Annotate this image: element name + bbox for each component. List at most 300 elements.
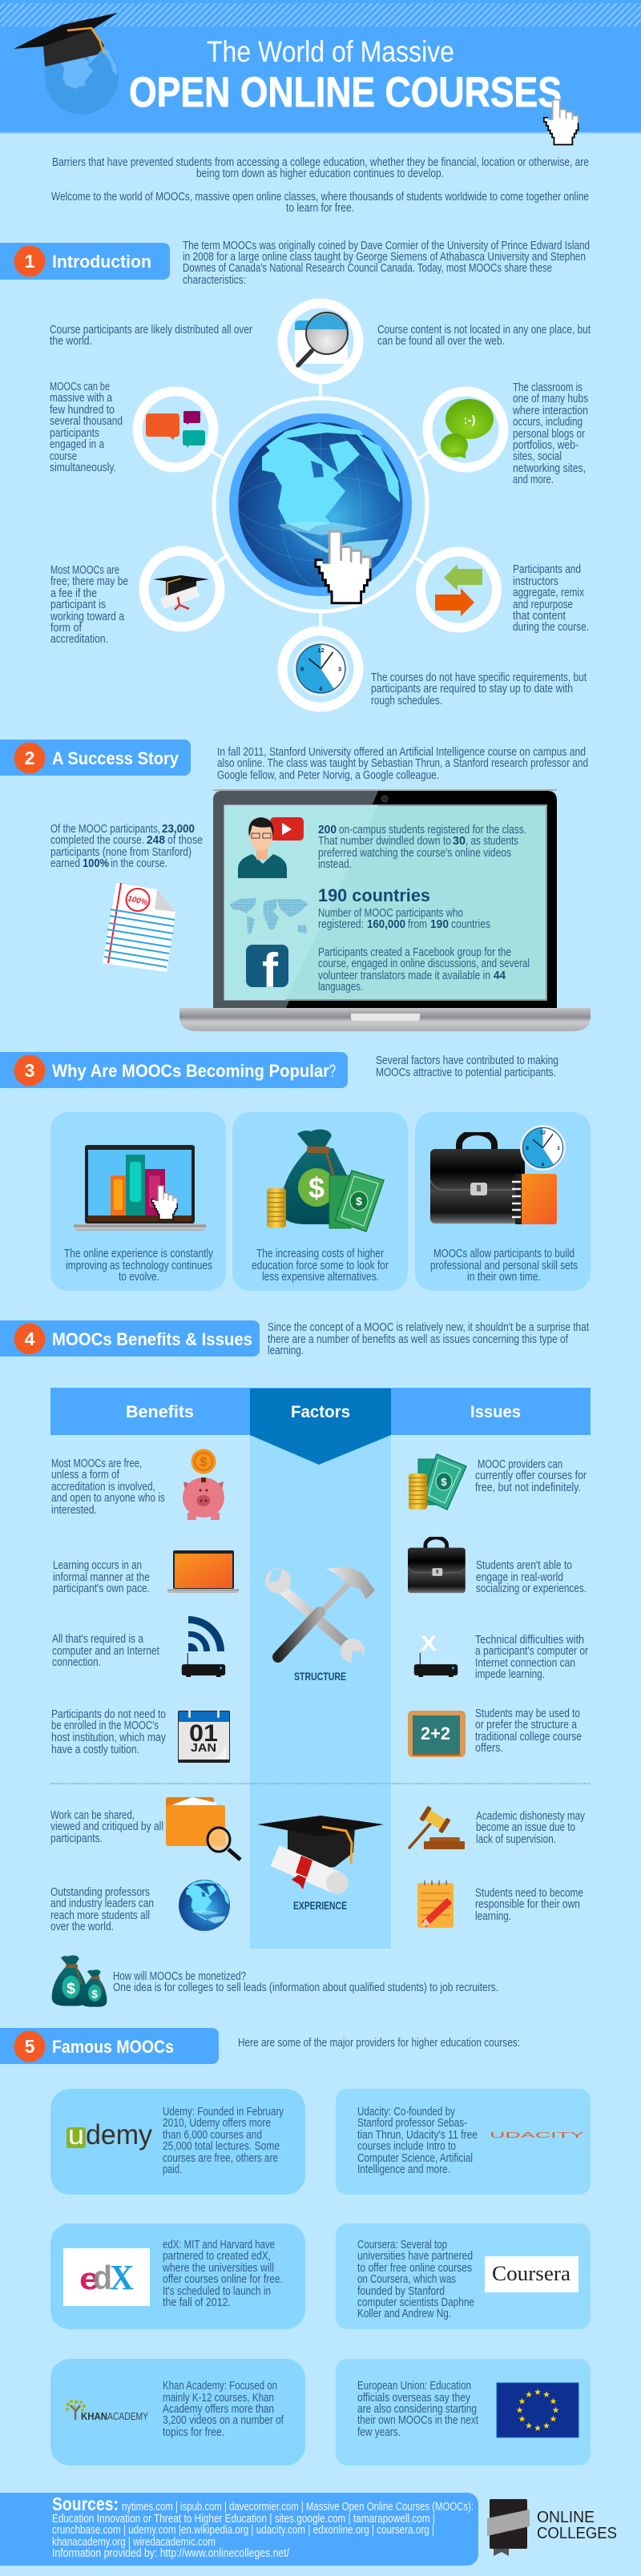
benefit: sharing work: Work can be shared, [50, 1809, 135, 1822]
issue: socializing [476, 1559, 587, 1595]
description: founded by Stanford [357, 2285, 445, 2298]
issue: traditional structure [475, 1707, 582, 1755]
benefit: no enrollment: have a costly tuition. [51, 1744, 139, 1756]
factor icon: wrench and hammer [265, 1566, 375, 1664]
issue: socializing: engage in real-world [476, 1571, 563, 1584]
logo: udemy: demy [86, 2119, 152, 2151]
Online Colleges logo [487, 2499, 617, 2556]
logo: udemy: u [68, 2120, 84, 2151]
intro text: being torn down as higher education continues to develop. [196, 167, 444, 180]
characteristic: free: a fee if the [50, 587, 97, 600]
characteristic: massive: participants [50, 427, 99, 440]
caption: The increasing costs of higher [256, 1248, 384, 1260]
benefit: no enrollment: host institution, which may [51, 1731, 167, 1744]
characteristic: free [50, 564, 128, 646]
icon: piggy bank with coin [183, 1449, 224, 1520]
screen text: facebook group: Participants created a Facebook group for the [318, 946, 511, 959]
description: courses are free, others are [163, 2152, 278, 2165]
description [162, 2239, 283, 2309]
completion statistics text: Of the MOOC participants, [50, 823, 160, 836]
characteristic: hubs [512, 381, 588, 486]
node: cap and diploma [144, 551, 220, 627]
screen text: facebook group: course, engaged in online discussions, and several [318, 957, 530, 970]
characteristic: free: working toward a [50, 611, 125, 623]
title: OPEN ONLINE COURSES [129, 69, 562, 116]
caption: The online experience is constantly [64, 1248, 214, 1260]
screen text: 190 countries: registered: [318, 918, 364, 931]
screen text: on-campus students [318, 824, 526, 871]
screen text: 190 countries: Number of MOOC participants who [318, 907, 463, 920]
section 5 intro text: Here are some of the major providers for higher education courses: [238, 2037, 520, 2050]
column heading: issues: Issues [470, 1403, 521, 1421]
icon: calendar: 01 [189, 1720, 218, 1747]
completion statistics text: 23,000 [162, 823, 195, 836]
issue: socializing: Students aren't able to [476, 1559, 572, 1572]
description [357, 2239, 474, 2320]
characteristic: aggregate and remix: that content [513, 610, 566, 623]
section 3 heading: ? [329, 1061, 336, 1081]
laptop [179, 789, 591, 1031]
icon: broken connection router [414, 1631, 458, 1677]
section 4 heading: MOOCs Benefits & Issues [52, 1329, 252, 1349]
issue: technical difficulties [475, 1634, 588, 1681]
description: than 6,000 courses and [163, 2129, 262, 2142]
screen text: 190 countries: 190 countries [318, 885, 430, 905]
logo: Khan Academy: KHAN [81, 2410, 107, 2422]
issue: traditional structure: or prefer the structure a [475, 1719, 578, 1731]
description: 2010, Udemy offers more [163, 2117, 271, 2130]
logo: udacity: UDACITY [490, 2131, 584, 2140]
benefit: reach: reach more students all [50, 1909, 150, 1922]
section 1 intro text: characteristics: [183, 274, 246, 287]
benefit: free: accreditation is involved, [51, 1481, 155, 1494]
section 5 heading: 5 [25, 2036, 35, 2057]
completion statistics text [50, 823, 203, 870]
issue: academic dishonesty: Academic dishonesty may [476, 1810, 586, 1823]
section 2 intro text: Google fellow, and Peter Norvig, a Google colleague. [217, 769, 439, 782]
characteristic: massive: course [50, 450, 77, 463]
icon: money bags [52, 1955, 107, 2007]
icon: gavel [409, 1806, 465, 1849]
intro text: to learn for free. [286, 202, 354, 215]
icon: chalkboard [408, 1711, 466, 1757]
issue: technical difficulties: a participant's computer or [475, 1645, 588, 1658]
logo: Khan Academy [66, 2400, 148, 2422]
characteristic: distributed participants [50, 324, 252, 348]
benefit: sharing work: viewed and critiqued by all [50, 1820, 163, 1833]
characteristic: no specific requirements: The courses do not have specific requirements, but [371, 671, 587, 684]
description [357, 2106, 478, 2176]
characteristic: no specific requirements: rough schedules. [371, 695, 442, 707]
laptop base [179, 1008, 591, 1031]
issue: self-responsibility: Students need to become [475, 1887, 583, 1900]
characteristic: hubs: one of many hubs [513, 393, 588, 405]
description: partnered to created edX, [163, 2250, 271, 2263]
sources text: crunchbase.com | udemy.com |en.wikipedia.org | udacity.com | edxonline.org | coursera.org | [52, 2524, 434, 2537]
characteristic: hubs: networking sites, [513, 462, 586, 475]
description: It's scheduled to launch in [163, 2285, 271, 2298]
description [357, 2380, 478, 2439]
description: on Coursera, which was [357, 2273, 456, 2286]
characteristic: no specific requirements [371, 671, 587, 707]
issue: not indefinitely free: MOOC providers can [478, 1458, 562, 1471]
section 4 intro text: there are a number of benefits as well as issues concerning this type of [268, 1333, 569, 1346]
completion statistics text: 248 [147, 834, 165, 847]
icon: teal bills and coins [409, 1454, 466, 1510]
description: 3,200 videos on a number of [163, 2414, 284, 2427]
monetization note [52, 1955, 498, 2007]
section 4 heading [0, 1320, 260, 1357]
panel: Khan Academy [50, 2359, 305, 2465]
screen text: 190 countries: from [408, 918, 427, 931]
issue: self-responsibility [475, 1887, 583, 1923]
characteristic: hubs: occurs, including [513, 416, 583, 429]
issue: socializing: socializing or experiences. [476, 1582, 587, 1595]
benefit: informal learning: Learning occurs in an [53, 1559, 142, 1572]
caption: less expensive alternatives. [262, 1271, 379, 1284]
icon: facebook [246, 944, 288, 998]
Online Colleges logo: COLLEGES [537, 2525, 617, 2542]
panel: Udacity [336, 2089, 591, 2195]
sources footer [0, 2493, 478, 2566]
icon: briefcase, clock and notebook [430, 1125, 566, 1224]
description: offer courses online for free. [163, 2273, 283, 2286]
caption [430, 1248, 578, 1284]
section 4 intro text [268, 1321, 589, 1357]
screen text: on-campus students: preferred watching the course's online videos [318, 847, 511, 860]
icon: notepad and pencil [417, 1881, 454, 1928]
central globe [229, 413, 412, 596]
characteristic: massive: massive with a [50, 392, 113, 405]
screen text: on-campus students: 200 [318, 824, 337, 836]
factor label: structure: STRUCTURE [294, 1670, 346, 1683]
characteristic: aggregate and remix: and repurpose [513, 599, 573, 611]
description: are also considering starting [357, 2403, 477, 2416]
benefit: no enrollment: be enrolled in the MOOC's [51, 1719, 159, 1732]
completion statistics text: earned [50, 857, 80, 870]
characteristic: hubs: and more. [513, 474, 554, 486]
issue: technical difficulties: Internet connection can [475, 1657, 575, 1670]
description: paid. [163, 2163, 182, 2176]
node: magnifier on web page [282, 303, 359, 380]
benefit: sharing work: participants. [50, 1832, 103, 1845]
characteristic: massive: few hundred to [50, 404, 115, 417]
completion statistics text: 100% [83, 857, 109, 870]
description: where the universities will [162, 2262, 274, 2275]
node: clock [282, 631, 359, 707]
panel: European Union [336, 2359, 591, 2465]
issue: self-responsibility: responsible for their own [475, 1898, 580, 1911]
panel: edX [50, 2223, 305, 2329]
icon: facebook: f [262, 944, 279, 998]
logo: Coursera: Coursera [492, 2262, 570, 2285]
section 1 intro text: Downes of Canada's National Research Council Canada. Today, most MOOCs share these [183, 262, 552, 275]
characteristic: massive: MOOCs can be [50, 381, 110, 393]
icon: wifi router [182, 1616, 225, 1677]
icon: piggy bank with coin: $ [200, 1456, 208, 1469]
monetization text: One idea is for colleges to sell leads (information about qualified students) to job recruiters. [113, 1981, 498, 1994]
characteristic: hubs: personal blogs or [513, 428, 585, 441]
sources text: khanacademy.org | wiredacademic.com [52, 2536, 216, 2549]
characteristic: hubs: sites, social [513, 450, 562, 463]
characteristic: aggregate and remix: aggregate, remix [513, 587, 585, 599]
benefit: only a computer: All that's required is a [52, 1633, 144, 1646]
benefit: sharing work [50, 1809, 163, 1845]
section 3 intro text: MOOCs attractive to potential participants. [376, 1066, 556, 1079]
issue: not indefinitely free [475, 1458, 587, 1494]
section 4 heading: 4 [25, 1328, 35, 1349]
icon: broken connection router: X [421, 1631, 437, 1655]
caption [252, 1248, 389, 1284]
benefit: reach: and industry leaders can [50, 1897, 154, 1910]
title [129, 35, 562, 116]
characteristic: hubs: where interaction [512, 405, 588, 417]
sources text: nytimes.com | ispub.com | davecormier.com | Massive Open Online Courses (MOOCs): [122, 2501, 474, 2514]
screen text: on-campus students: 30 [453, 835, 466, 848]
benefit: free: and open to anyone who is [51, 1492, 165, 1505]
screen text: on-campus students: , as students [466, 835, 518, 848]
sources text: Sources: [52, 2493, 119, 2514]
issue: traditional structure: Students may be used to [475, 1707, 580, 1720]
icon: orange laptop [167, 1550, 239, 1593]
issue: technical difficulties: Technical difficulties with [475, 1634, 584, 1647]
description: Khan Academy: Focused on [163, 2380, 277, 2393]
characteristic: aggregate and remix: instructors [513, 575, 558, 588]
section 2 heading [0, 740, 191, 776]
section 1 intro text [183, 240, 590, 287]
laptop screen [224, 805, 546, 1000]
factor label: experience: EXPERIENCE [293, 1899, 347, 1912]
icon: calendar: JAN [191, 1741, 216, 1755]
Online Colleges logo: ONLINE [537, 2509, 595, 2526]
benefit: reach [50, 1886, 154, 1933]
benefit: only a computer: connection. [52, 1656, 101, 1669]
issue: traditional structure: offers. [475, 1742, 503, 1755]
screen text: facebook group: volunteer translators made it available in [318, 970, 490, 982]
description: Computer Science, Artificial [357, 2152, 473, 2165]
issue: academic dishonesty: lack of supervision. [476, 1833, 556, 1846]
characteristic: content all over the web [377, 324, 591, 348]
characteristic: content all over the web: Course content is not located in any one place, but [377, 324, 591, 337]
section 3 intro text [376, 1054, 558, 1079]
description: Udacity: Co-founded by [357, 2106, 456, 2118]
caption: education force some to look for [252, 1260, 389, 1272]
panel: online experience [50, 1112, 226, 1291]
sources text [52, 2493, 474, 2560]
section 5 heading: Famous MOOCs [52, 2037, 174, 2057]
issue: traditional structure: traditional college course [475, 1731, 582, 1744]
screen text: on-campus students: instead. [318, 858, 352, 871]
completion statistics text: participants (none from Stanford) [50, 846, 191, 859]
caption: in their own time. [467, 1271, 541, 1284]
logo: edX: d [93, 2259, 112, 2296]
issue: not indefinitely free: free, but not indefinitely. [475, 1482, 581, 1494]
node: green smiley bubbles: :-) [463, 413, 476, 427]
caption: professional and personal skill sets [430, 1260, 578, 1272]
characteristic: content all over the web: can be found all over the web. [377, 335, 505, 348]
screen text: 190 countries: 160,000 [367, 918, 405, 931]
column heading: benefits: Benefits [126, 1403, 194, 1421]
logo: edX: X [110, 2258, 134, 2297]
section 5 heading [0, 2028, 219, 2064]
icon: graded paper [103, 883, 175, 972]
logo: Khan Academy: ACADEMY [107, 2410, 148, 2422]
logo: Coursera [485, 2256, 579, 2292]
section 3 heading: Why Are MOOCs Becoming Popular [52, 1061, 329, 1081]
characteristic: hubs: portfolios, web- [513, 439, 579, 452]
description: Academy offers more than [163, 2403, 274, 2416]
screen text: on-campus students: on-campus students registered for the class. [339, 824, 526, 836]
characteristic: massive: several thousand [50, 415, 123, 428]
icon: money bag, coins and bills [267, 1130, 384, 1232]
description: Koller and Andrew Ng. [357, 2308, 451, 2320]
issue: self-responsibility: learning. [475, 1910, 511, 1923]
description: Coursera: Several top [357, 2239, 447, 2251]
benefit: reach: over the world. [50, 1921, 114, 1933]
benefit: free: interested. [51, 1504, 97, 1517]
section 2 intro text [217, 746, 588, 782]
caption [64, 1248, 214, 1284]
completion statistics text: completed the course. [50, 834, 144, 847]
logo: edX: e [79, 2263, 99, 2296]
characteristic: massive: simultaneously. [50, 462, 116, 474]
panel: Coursera [336, 2223, 591, 2329]
monetization text: How will MOOCs be monetized? [113, 1970, 246, 1983]
benefit: informal learning: informal manner at the [53, 1571, 150, 1584]
benefit: only a computer [52, 1633, 159, 1669]
description: few years. [357, 2426, 401, 2439]
header banner [0, 0, 641, 145]
description: the fall of 2012. [163, 2296, 231, 2309]
characteristic: distributed participants: Course participants are likely distributed all over [50, 324, 252, 337]
benefit: free [51, 1457, 165, 1517]
icon: EU flag [497, 2383, 579, 2437]
description [163, 2106, 284, 2176]
section 3 intro text: Several factors have contributed to making [376, 1054, 558, 1067]
description: computer scientists Daphne [357, 2296, 474, 2309]
caption: MOOCs allow participants to build [433, 1248, 574, 1260]
screen text: facebook group [318, 946, 530, 994]
description: to offer free online courses [357, 2262, 472, 2275]
icon: person with video button [238, 817, 304, 878]
characteristics hub diagram [138, 303, 503, 707]
screen text: facebook group: 44 [494, 970, 506, 982]
characteristic: free: accreditation. [50, 633, 108, 646]
benefits and issues table [50, 1388, 591, 1949]
description: European Union: Education [357, 2380, 471, 2393]
panel: increasing costs [232, 1112, 408, 1291]
section 2 heading: 2 [25, 748, 34, 768]
icon: globe with graduation cap [14, 13, 119, 115]
sources text: Education Innovation or Threat to Higher Education | sites.google.com | tamarapowell.com | [52, 2513, 435, 2526]
icon: graded paper: 100% [127, 894, 148, 908]
icon: calendar [178, 1707, 230, 1763]
characteristic: free: free; there may be [50, 575, 128, 588]
caption: improving as technology continues [66, 1260, 212, 1272]
characteristic: free: participant is [50, 599, 106, 611]
screen text: on-campus students: That number dwindled down to [318, 835, 451, 848]
icon: small globe [179, 1880, 230, 1931]
description: topics for free. [163, 2426, 224, 2439]
section 3 heading: 3 [25, 1060, 34, 1081]
description: their own MOOCs in the next [357, 2414, 478, 2427]
benefit: reach: Outstanding professors [50, 1886, 150, 1899]
description: edX: MIT and Harvard have [163, 2239, 275, 2251]
issue: academic dishonesty [476, 1810, 586, 1846]
section 1 heading: 1 [25, 251, 35, 272]
screen text: facebook group: languages. [318, 981, 363, 994]
section 1 heading: Introduction [52, 252, 151, 272]
section 3 heading [0, 1052, 348, 1088]
benefit: no enrollment [51, 1708, 167, 1756]
issue: not indefinitely free: currently offer courses for [475, 1469, 587, 1482]
monetization text [113, 1970, 498, 1994]
node: green smiley bubbles [428, 391, 503, 468]
benefit: free: unless a form of [51, 1469, 120, 1482]
icon: money bag, coins and bills: $ [356, 1195, 362, 1207]
characteristic: aggregate and remix: during the course. [513, 621, 589, 634]
characteristic: massive: engaged in a [50, 438, 105, 451]
icon: laptop with books [74, 1145, 206, 1231]
caption: to evolve. [119, 1271, 159, 1284]
benefit: no enrollment: Participants do not need to [51, 1708, 166, 1721]
characteristic: distributed participants: the world. [50, 335, 92, 348]
icon: chalkboard: 2+2 [421, 1723, 450, 1744]
icon: pointer hand [544, 99, 579, 145]
central ring [214, 398, 427, 611]
factor icon: graduation cap and diploma [257, 1816, 384, 1894]
panel: Udemy [50, 2089, 305, 2195]
description: tian Thrun, Udacity's 11 free [357, 2129, 478, 2142]
icon: dotted world map [230, 898, 308, 933]
column heading: factors: Factors [291, 1403, 350, 1421]
characteristic: free: form of [50, 622, 83, 635]
sources text: Information provided by: http://www.onlinecolleges.net/ [52, 2547, 290, 2560]
description: courses include Intro to [357, 2140, 456, 2153]
benefit: only a computer: computer and an Internet [52, 1645, 159, 1658]
characteristic: aggregate and remix: Participants and [513, 563, 581, 576]
screen text: 190 countries [318, 885, 490, 931]
completion statistics text: of those [167, 834, 203, 847]
section 4 intro text: learning. [268, 1344, 304, 1357]
screen text: 190 countries: 190 [430, 918, 449, 931]
node: exchange arrows [421, 551, 497, 628]
description: mainly K-12 courses, Khan [163, 2392, 274, 2405]
description: universities have partnered [357, 2250, 473, 2263]
intro text [51, 156, 589, 215]
issue: technical difficulties: impede learning. [475, 1668, 545, 1681]
icon: briefcase [408, 1538, 466, 1593]
description [163, 2380, 284, 2439]
characteristic: free: Most MOOCs are [50, 564, 119, 577]
central pointer hand [316, 531, 370, 603]
screen text: 190 countries: countries [451, 918, 490, 931]
characteristic: aggregate and remix [513, 563, 589, 634]
completion statistics text: in the course. [111, 857, 167, 870]
characteristic: no specific requirements: participants are required to stay up to date with [371, 683, 573, 695]
benefit: informal learning: participant's own pace. [53, 1582, 150, 1595]
description: Stanford professor Sebas- [357, 2117, 467, 2130]
panel: build skills [415, 1112, 591, 1291]
description: 25,000 total lectures. Some [163, 2140, 280, 2153]
node: speech bubbles [138, 391, 213, 468]
issue: academic dishonesty: become an issue due to [476, 1821, 575, 1834]
section 1 heading [0, 243, 170, 280]
title: The World of Massive [207, 35, 454, 68]
benefit: free: Most MOOCs are free, [51, 1457, 142, 1470]
description: Intelligence and more. [357, 2163, 450, 2176]
section 2 heading: A Success Story [52, 748, 179, 768]
